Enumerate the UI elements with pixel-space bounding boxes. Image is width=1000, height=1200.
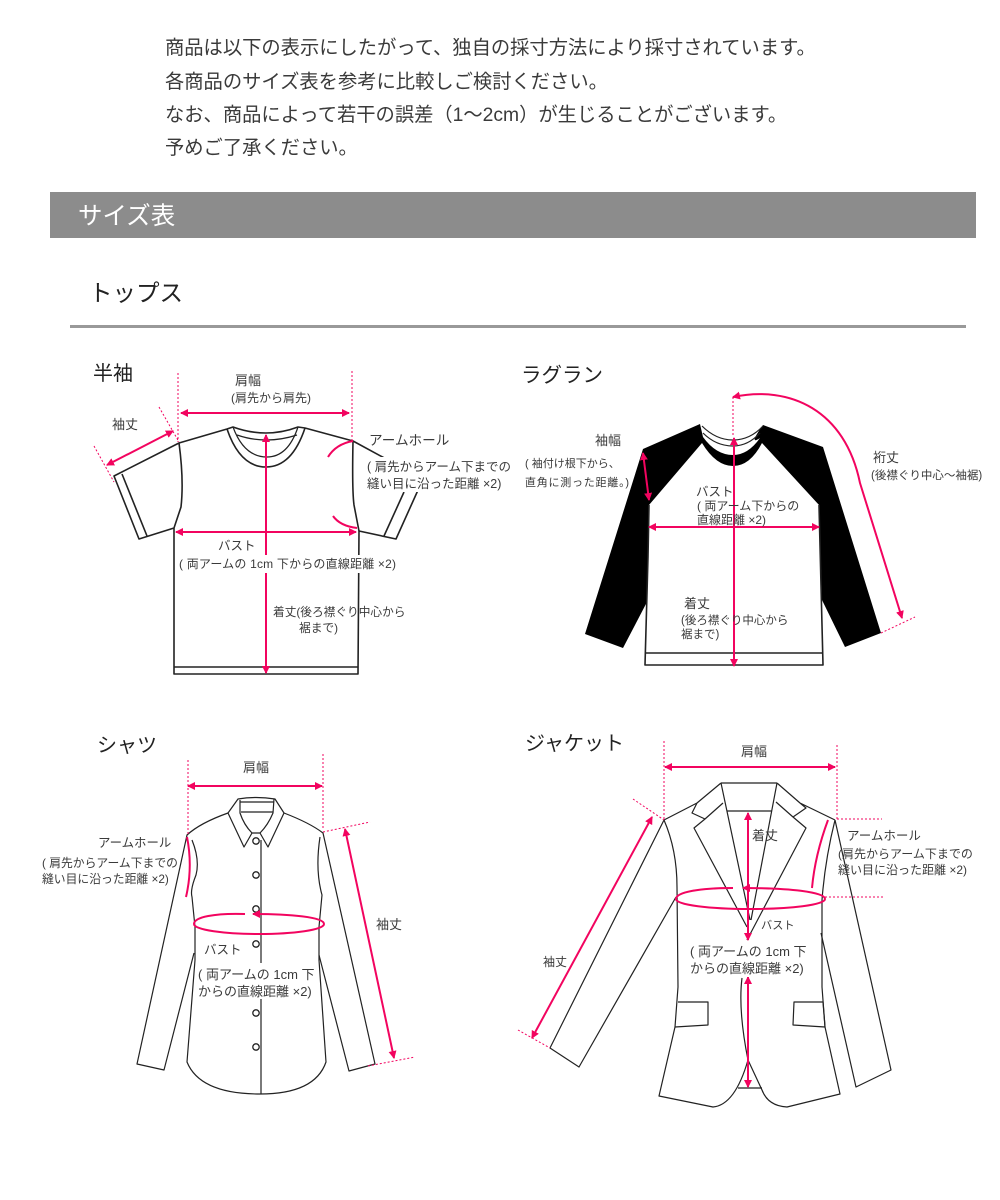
- label: 着丈: [273, 605, 405, 635]
- intro text block: 各商品のサイズ表を参考に比較しご検討ください。: [165, 71, 608, 93]
- heading: ラグラン: ラグラン: [521, 364, 603, 387]
- intro text block: 商品は以下の表示にしたがって、独自の採寸方法により採寸されています。: [165, 37, 816, 59]
- label: 袖幅: 直角に測った距離。): [525, 475, 629, 489]
- label: バスト: ( 両アームの 1cm 下: [198, 967, 315, 982]
- label: アームホール: アームホール: [98, 836, 171, 850]
- heading: ジャケット: ジャケット: [525, 733, 624, 755]
- label: 着丈: (後ろ襟ぐり中心から: [681, 613, 788, 627]
- label: 着丈: 裾まで): [299, 621, 338, 635]
- intro text block: [165, 37, 816, 159]
- section banner: サイズ表: [50, 192, 976, 238]
- label: バスト: [688, 919, 807, 977]
- intro text block: なお、商品によって若干の誤差（1〜2cm）が生じることがございます。: [165, 103, 787, 126]
- measurement arrows: ラグラン: [643, 394, 915, 666]
- label: 袖丈: 袖丈: [376, 917, 402, 932]
- label: 袖丈: 袖丈: [543, 955, 567, 969]
- section banner: サイズ表: サイズ表: [78, 202, 175, 230]
- label: 裄丈: [871, 450, 982, 482]
- label: アームホール: 縫い目に沿った距離 ×2): [838, 862, 967, 877]
- label: バスト: ( 両アームの 1cm 下: [690, 944, 807, 959]
- label: バスト: [696, 485, 799, 527]
- label: 着丈: 着丈: [752, 828, 778, 843]
- shirt outline: [137, 798, 375, 1094]
- label: アームホール: (肩先からアーム下までの: [838, 847, 973, 861]
- label: アームホール: アームホール: [369, 433, 449, 448]
- label: バスト: [196, 943, 318, 999]
- heading: シャツ: シャツ: [97, 735, 157, 757]
- label: アームホール: 縫い目に沿った距離 ×2): [42, 872, 169, 886]
- label: 着丈: 裾まで): [681, 627, 719, 641]
- label: 裄丈: 裄丈: [873, 450, 899, 465]
- label: 着丈: 着丈(後ろ襟ぐり中心から: [273, 605, 405, 619]
- label: 肩幅: 肩幅: [741, 744, 767, 759]
- label: バスト: ( 両アームの 1cm 下からの直線距離 ×2): [179, 556, 396, 571]
- label: アームホール: 縫い目に沿った距離 ×2): [367, 476, 501, 491]
- label: 袖幅: 袖幅: [595, 433, 621, 448]
- label: 着丈: 着丈: [684, 596, 710, 611]
- label: バスト: バスト: [761, 919, 795, 932]
- measurement arrows: シャツ: [186, 754, 415, 1066]
- label: バスト: バスト: [696, 485, 734, 499]
- panel: 半袖: [93, 362, 511, 674]
- panel: ジャケット: [518, 733, 973, 1107]
- panel: ラグラン: [521, 364, 982, 666]
- label: バスト: からの直線距離 ×2): [690, 961, 804, 976]
- label: 肩幅: (肩先から肩先): [231, 391, 311, 405]
- label: 袖幅: ( 袖付け根下から、: [525, 456, 620, 470]
- heading: トップス: [70, 280, 966, 328]
- measurement arrows: 半袖: [94, 371, 357, 673]
- panel: シャツ: [42, 735, 415, 1094]
- intro text block: 予めご了承ください。: [165, 137, 358, 159]
- label: バスト: バスト: [204, 943, 242, 957]
- label: 着丈: [681, 596, 788, 641]
- label: アームホール: [838, 829, 973, 877]
- label: バスト: ( 両アーム下からの: [697, 499, 799, 513]
- label: アームホール: アームホール: [847, 829, 921, 843]
- label: アームホール: ( 肩先からアーム下までの: [42, 856, 178, 870]
- label: 肩幅: 肩幅: [235, 373, 261, 388]
- label: アームホール: [42, 836, 178, 886]
- label: バスト: からの直線距離 ×2): [198, 984, 312, 999]
- heading: トップス: トップス: [89, 280, 183, 306]
- label: 裄丈: (後襟ぐり中心〜袖裾): [871, 468, 982, 482]
- raglan outline: [585, 424, 881, 665]
- label: 肩幅: [231, 373, 311, 405]
- label: アームホール: ( 肩先からアーム下までの: [367, 460, 511, 474]
- jacket outline: [550, 783, 891, 1107]
- label: バスト: バスト: [218, 539, 256, 553]
- t-shirt outline: [114, 427, 423, 674]
- label: 袖丈: 袖丈: [112, 417, 138, 432]
- label: 肩幅: 肩幅: [243, 760, 269, 775]
- label: バスト: 直線距離 ×2): [697, 512, 766, 527]
- label: アームホール: [365, 433, 511, 492]
- label: バスト: [178, 539, 396, 573]
- measurement arrows: ジャケット: [518, 741, 884, 1087]
- heading: 半袖: 半袖: [93, 362, 133, 385]
- label: 袖幅: [525, 433, 629, 489]
